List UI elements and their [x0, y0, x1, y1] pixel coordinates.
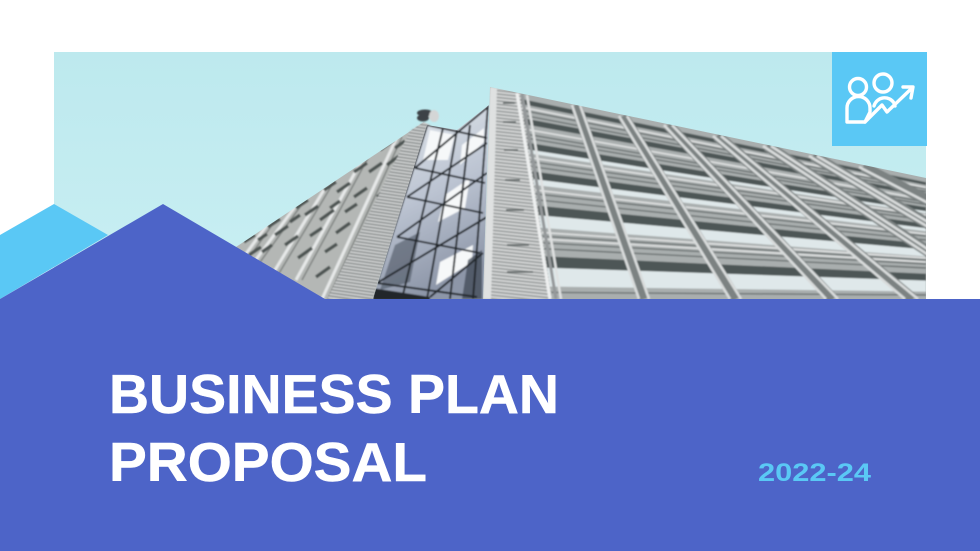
accent shape: light blue peak [0, 204, 108, 299]
date range: 2022-24 [758, 459, 871, 487]
building: rooftop equipment [417, 110, 439, 122]
title: business plan proposal: BUSINESS PLAN [109, 363, 559, 425]
icon tile: people with rising arrow [832, 52, 927, 146]
title: business plan proposal: PROPOSAL [109, 431, 427, 493]
building: striped corner pier [327, 122, 430, 299]
lower panel: blue band with peak [0, 204, 980, 551]
facade corner louvres [490, 88, 552, 299]
building: right facade [480, 85, 938, 301]
building: left facade [236, 122, 424, 299]
photo: office building against a pale sky [54, 52, 938, 303]
title: business plan proposal [109, 363, 559, 493]
sky background [54, 52, 926, 299]
building: glass curtain wall [373, 105, 489, 299]
